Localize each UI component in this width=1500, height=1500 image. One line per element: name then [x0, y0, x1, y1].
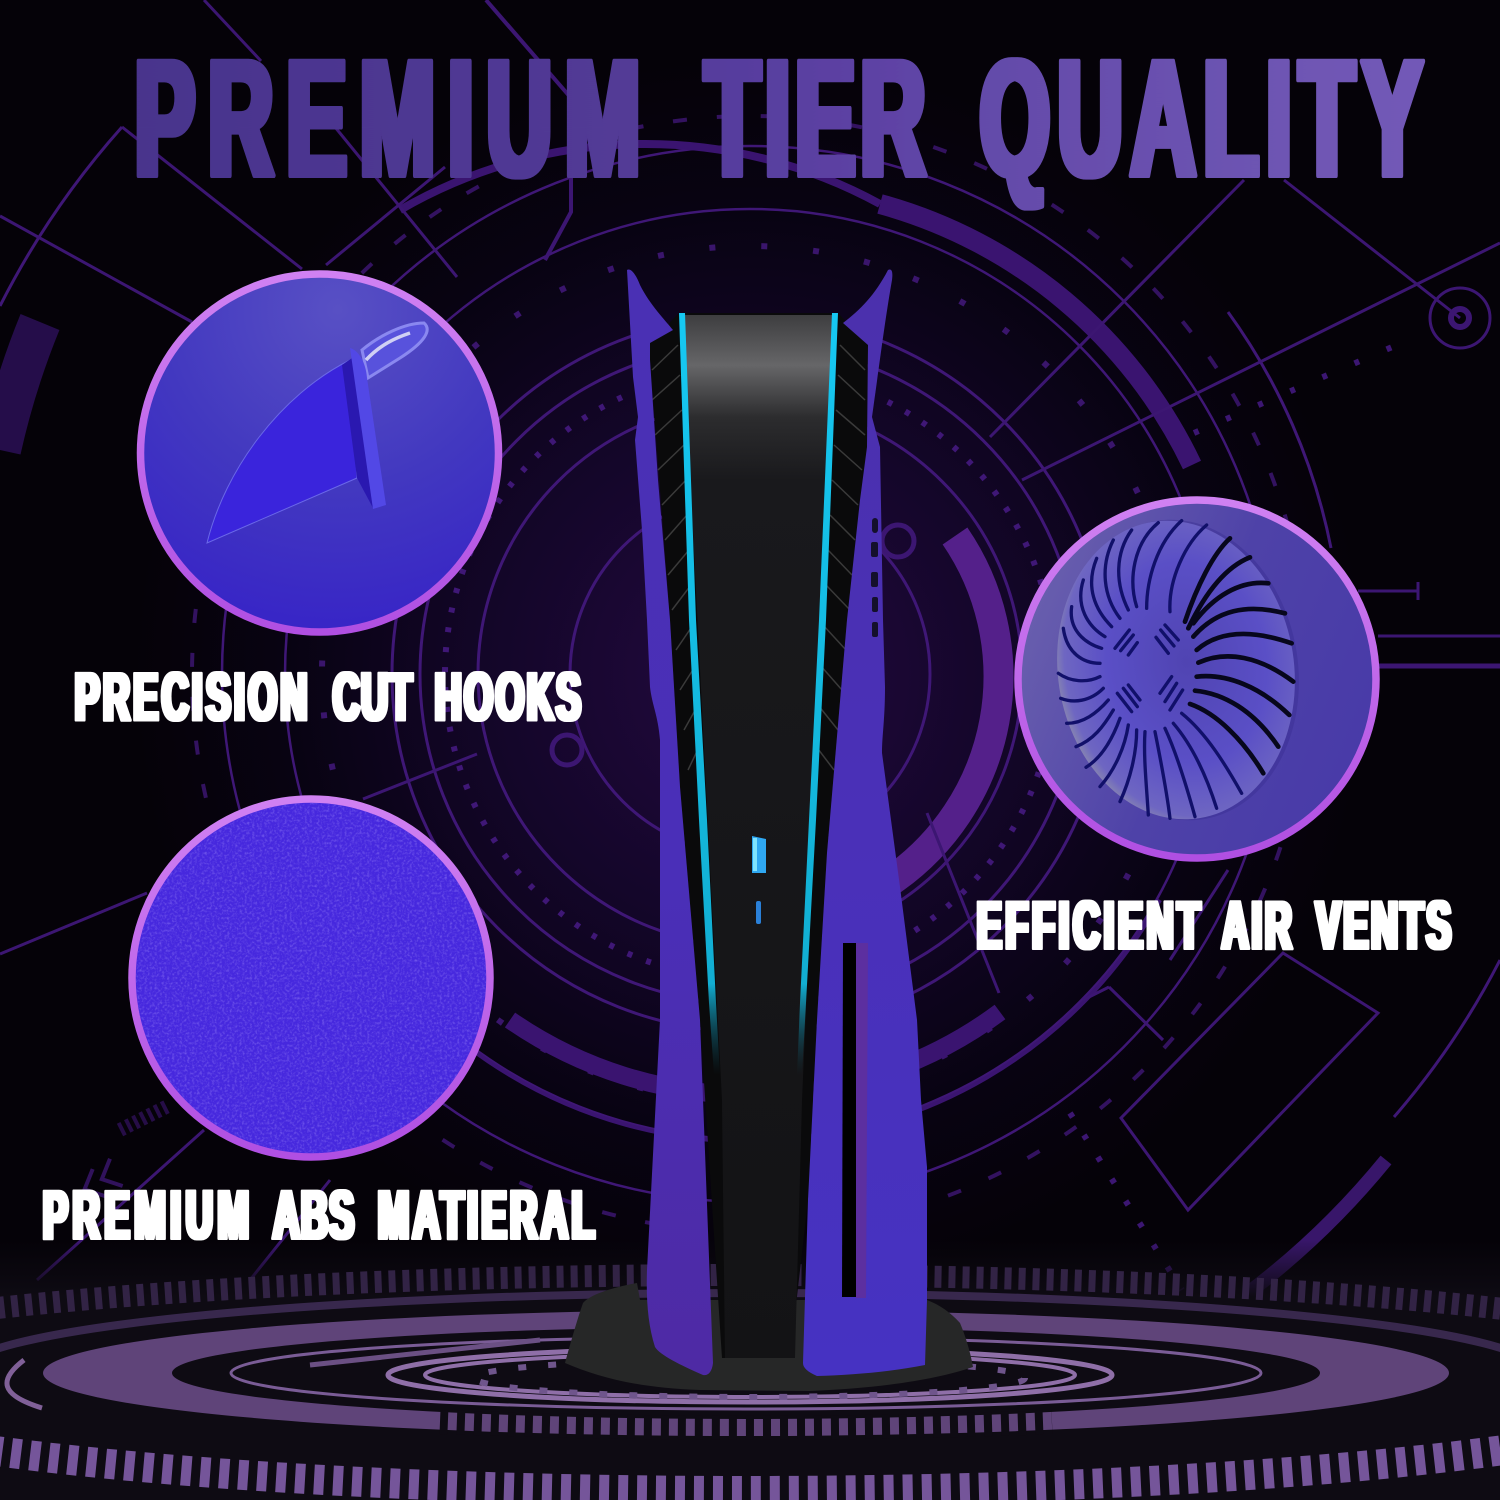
label: VENTS: [1316, 888, 1451, 963]
hook shadow: [342, 358, 373, 508]
feature: premium ABS material: [43, 797, 595, 1253]
label: [43, 1176, 595, 1253]
power and USB LEDs: [752, 836, 766, 924]
disc slot: [842, 943, 868, 1298]
label: HOOKS: [435, 659, 581, 735]
side fins: [652, 345, 865, 770]
label: MATIERAL: [378, 1176, 595, 1253]
label: ABS: [273, 1176, 354, 1253]
feature: precision cut hooks: [75, 274, 581, 735]
label: [977, 888, 1451, 963]
vent holes: [871, 518, 878, 637]
floor: concentric platform rings: [0, 1240, 1500, 1500]
label: CUT: [333, 659, 412, 735]
title: QUALITY: [980, 26, 1422, 212]
title: TIER: [705, 26, 925, 212]
label: [75, 659, 581, 735]
title: PREMIUM: [135, 26, 640, 212]
circle image: textured surface: [130, 797, 492, 1159]
left faceplate: [627, 270, 713, 1375]
circle image: hook: [140, 274, 498, 632]
black centre body: [650, 313, 868, 1358]
right faceplate: [803, 269, 927, 1376]
label: PRECISION: [75, 659, 307, 735]
swirl vent grille: [1036, 502, 1320, 838]
stand: [565, 1283, 973, 1391]
console with purple faceplates on stand: [565, 269, 973, 1391]
title: [135, 26, 1422, 212]
hook loop: [362, 323, 427, 378]
label: AIR: [1222, 888, 1292, 963]
label: PREMIUM: [43, 1176, 249, 1253]
label: EFFICIENT: [977, 888, 1200, 963]
feature: efficient air vents: [977, 500, 1451, 963]
hook bar: [350, 348, 386, 509]
cyan light bars: [679, 313, 838, 1075]
central black plate: [682, 315, 836, 1358]
circle image: vent: [1018, 500, 1376, 858]
hook fin: [207, 360, 357, 543]
